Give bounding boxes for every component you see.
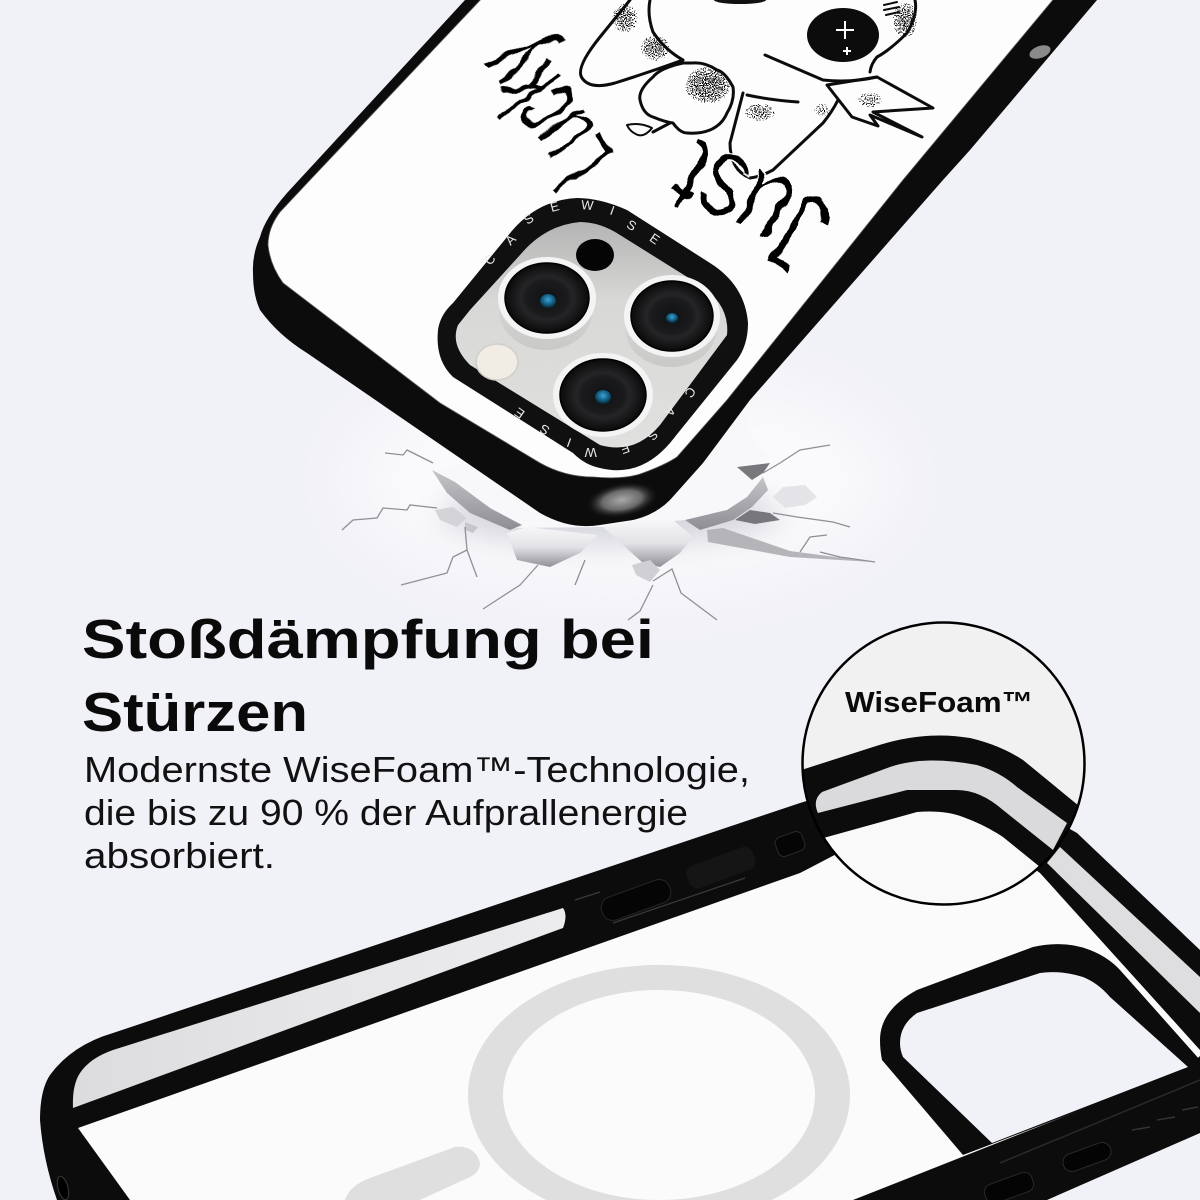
tooth outline	[580, 0, 933, 178]
brand ring text top: CASEWISE	[481, 197, 663, 268]
case frame	[40, 774, 1200, 1200]
alignment pill	[345, 1147, 480, 1200]
white back panel	[268, 0, 1057, 478]
cracked ground impact	[342, 370, 890, 620]
heading: Stoßdämpfung bei	[82, 608, 654, 670]
case frame	[253, 0, 1097, 526]
tooth eye	[807, 8, 879, 62]
magnified foam strip	[816, 760, 1067, 850]
handwritten slogan: Just	[650, 114, 849, 300]
lens: top left	[498, 257, 596, 350]
lidar sensor	[576, 239, 614, 271]
lens: top right	[624, 275, 720, 367]
body text: Modernste WiseFoam™-Technologie,	[84, 749, 750, 790]
magnifier callout: WiseFoam: WiseFoam™	[845, 687, 1033, 719]
clear back panel	[78, 812, 1200, 1200]
body text: die bis zu 90 % der Aufprallenergie	[84, 792, 688, 833]
heading: Stürzen	[82, 681, 308, 743]
silver camera plate	[456, 222, 727, 448]
flash	[476, 344, 518, 380]
camera ring	[438, 198, 748, 470]
magnifier callout: WiseFoam	[801, 621, 1086, 906]
top phone with black case	[253, 0, 1097, 526]
tattoo tooth artwork	[580, 0, 933, 178]
lens: bottom	[553, 353, 653, 437]
side buttons	[575, 830, 807, 924]
brand ring text bottom: CASEWISE	[511, 384, 699, 460]
tooth mouth	[714, 0, 766, 4]
body text: absorbiert.	[84, 835, 275, 876]
heading	[82, 608, 654, 743]
handwritten slogan	[451, 18, 849, 300]
bottom phone case, inner view	[40, 774, 1200, 1200]
side strip: top left	[73, 908, 566, 1108]
magnetic ring	[468, 965, 850, 1200]
camera island	[438, 197, 748, 470]
magnified clear panel	[825, 812, 1039, 904]
side strip: right	[1047, 847, 1200, 1013]
camera cutout	[880, 944, 1200, 1155]
side button highlight	[1028, 43, 1052, 61]
body text	[84, 749, 750, 876]
stipple shading	[611, 0, 918, 121]
bottom edge details	[55, 1080, 1200, 1200]
magnified frame	[804, 736, 1077, 866]
glossy highlight on case corner	[584, 477, 660, 523]
